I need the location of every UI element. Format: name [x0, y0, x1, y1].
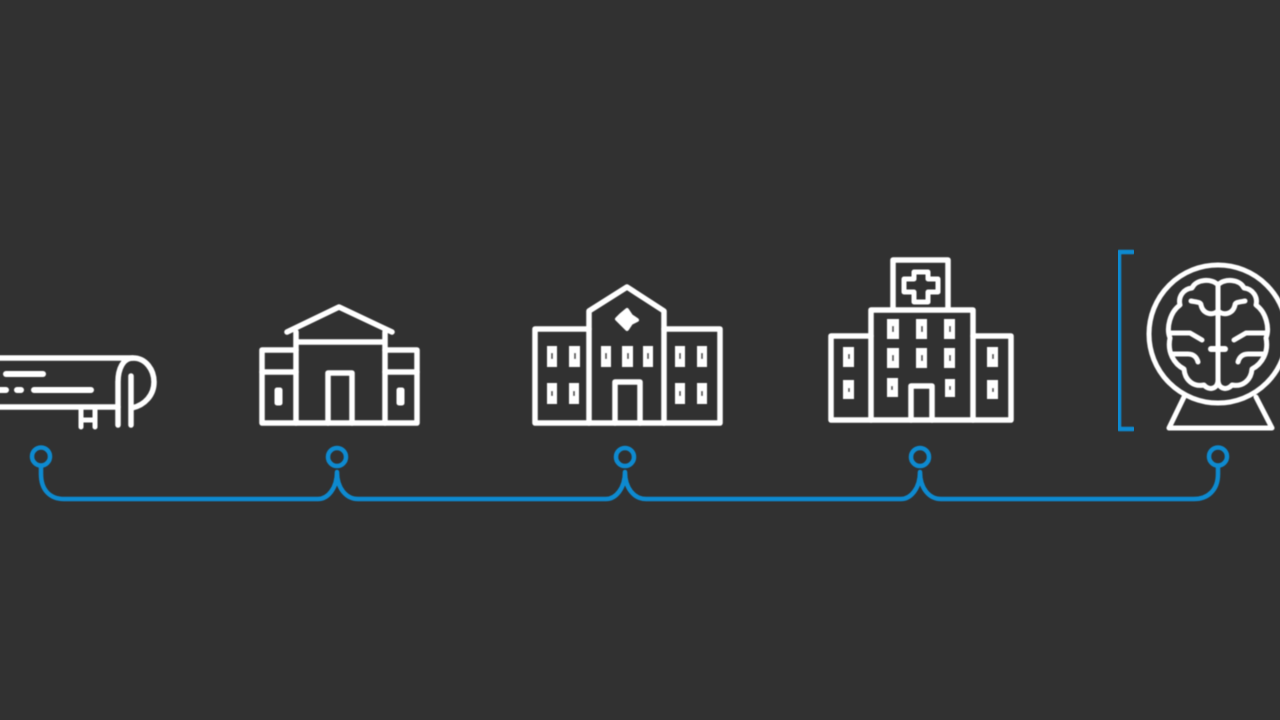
brain [1168, 280, 1218, 388]
timeline connector [32, 448, 1227, 499]
windows [843, 319, 998, 399]
icon: school-like hospital building [535, 287, 720, 423]
cross [904, 272, 938, 302]
icon: museum building [262, 307, 417, 423]
icon: diploma scroll [0, 358, 154, 427]
timeline nodes [32, 448, 1227, 466]
icon: brain in a globe [1149, 265, 1280, 428]
windows [547, 346, 707, 404]
bracket [1119, 252, 1133, 429]
icon: large hospital with cross sign [831, 260, 1011, 420]
connector path [41, 467, 1218, 499]
emblem [617, 310, 637, 329]
